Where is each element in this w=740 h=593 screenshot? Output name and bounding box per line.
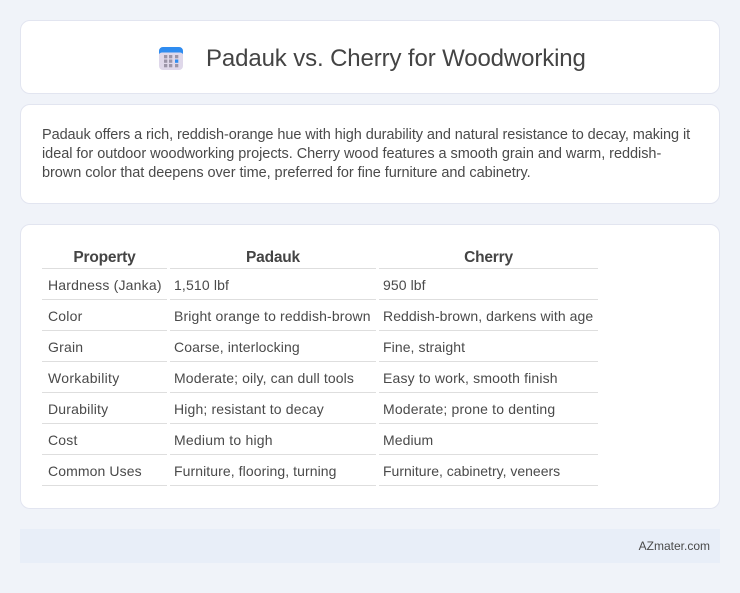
row: grain [48,339,465,355]
row: grain: Fine, straight [383,339,465,355]
row: common uses: Furniture, flooring, turning [174,463,337,479]
footer bar [20,529,720,563]
row: workability: Workability [48,370,120,386]
title: Padauk vs. Cherry for Woodworking [206,45,586,72]
row: common uses [48,463,560,479]
row: grain: Grain [48,339,83,355]
row: durability: Moderate; prone to denting [383,401,555,417]
table header: Cherry: Cherry [464,249,513,266]
text: summary line 3: brown color that deepens over time, preferred for fine furniture and cabinetry. [42,165,531,181]
row: color [48,308,593,324]
row: common uses: Common Uses [48,463,142,479]
panel: title card [20,20,720,94]
row: hardness: 1,510 lbf [174,277,229,293]
row: grain: Coarse, interlocking [174,339,300,355]
text: summary line 1: Padauk offers a rich, reddish-orange hue with high durability and natural resistance to decay, making it [42,127,690,143]
text: summary line 2: ideal for outdoor woodworking projects. Cherry wood features a smooth grain and warm, reddish- [42,146,661,162]
row: durability: High; resistant to decay [174,401,324,417]
row: workability: Easy to work, smooth finish [383,370,558,386]
table header: Property: Property [73,249,136,266]
table header: Padauk: Padauk [246,249,300,266]
row: cost: Medium [383,432,433,448]
row: durability: Durability [48,401,108,417]
row: color: Reddish-brown, darkens with age [383,308,593,324]
row: color: Color [48,308,82,324]
row: workability [48,370,558,386]
row: cost: Cost [48,432,78,448]
panel: description [20,104,720,204]
icon: calendar [159,47,183,70]
row: cost [48,432,433,448]
row: hardness [48,277,426,293]
panel: comparison table [20,224,720,509]
row: cost: Medium to high [174,432,273,448]
row: workability: Moderate; oily, can dull tools [174,370,354,386]
row: color: Bright orange to reddish-brown [174,308,371,324]
row: hardness: Hardness (Janka) [48,277,162,293]
row: common uses: Furniture, cabinetry, veneers [383,463,560,479]
footer source credit: AZmater.com [639,539,710,553]
row: durability [48,401,555,417]
row: hardness: 950 lbf [383,277,426,293]
